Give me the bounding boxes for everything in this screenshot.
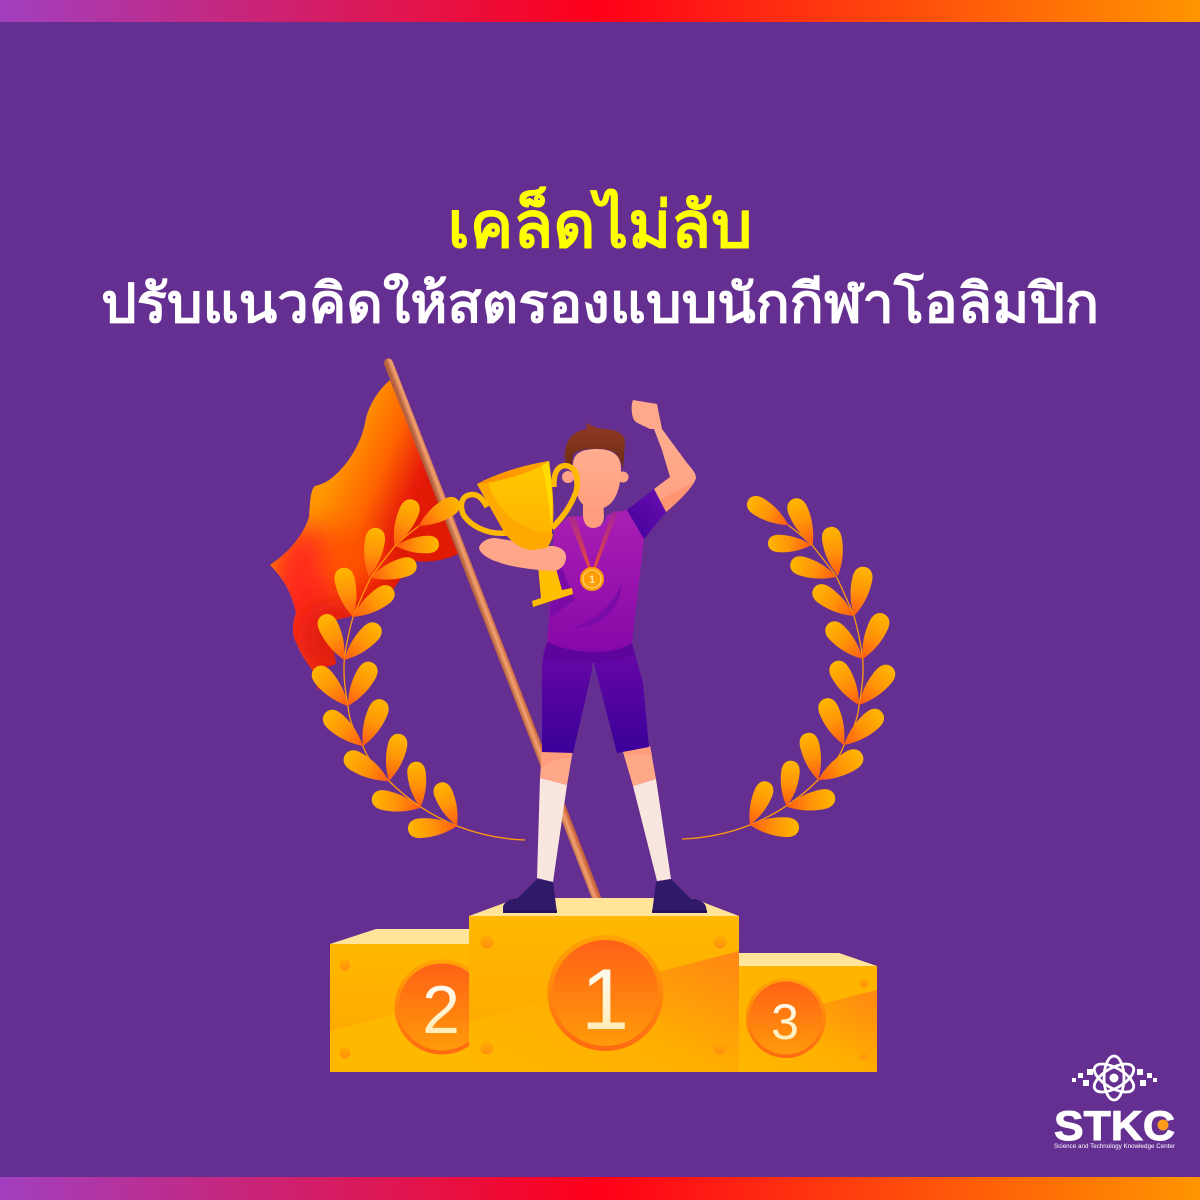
trophy rim — [477, 461, 549, 484]
podium — [330, 898, 877, 1072]
logo pixel dots — [1072, 1069, 1157, 1086]
t-shirt — [547, 510, 644, 652]
bottom gradient bar — [0, 1177, 1200, 1200]
title line 1: เคล็ดไม่ลับ — [448, 187, 752, 261]
right sock — [633, 779, 671, 881]
raised arm — [654, 429, 696, 512]
medal — [580, 567, 604, 591]
hair — [565, 423, 625, 470]
right laurel wreath — [682, 492, 900, 839]
trophy cup highlight — [541, 461, 552, 526]
shorts waist shadow — [544, 642, 635, 663]
logo tagline: Science and Technology Knowledge Center — [1054, 1144, 1175, 1150]
right leg — [623, 746, 656, 786]
left laurel wreath — [307, 493, 525, 840]
podium step 3: 3 — [771, 994, 799, 1050]
flag — [270, 380, 458, 692]
left sock — [537, 778, 567, 882]
medal: 1 — [589, 574, 595, 586]
flag pole — [388, 363, 597, 899]
sleeve — [627, 489, 666, 539]
trophy cup shade — [477, 483, 553, 550]
podium step 3 — [730, 953, 877, 1072]
right shoe — [652, 879, 707, 913]
trophy cup — [477, 461, 553, 550]
fist — [632, 400, 662, 429]
ears — [562, 471, 628, 483]
forearm holding trophy — [479, 538, 566, 571]
podium step 2 — [330, 929, 469, 1072]
shirt fold — [572, 583, 622, 628]
podium step 1 — [469, 898, 739, 1072]
logo atom icon — [1090, 1056, 1138, 1100]
podium step 2: 2 — [422, 972, 460, 1048]
trophy stem and base — [532, 565, 573, 607]
face — [573, 449, 621, 509]
neck — [583, 498, 604, 528]
upper arm shading — [660, 482, 694, 512]
medal ribbon — [568, 511, 618, 568]
STKC logo — [1054, 1056, 1175, 1150]
trophy handles — [461, 466, 577, 533]
title — [101, 187, 1099, 334]
shoe soles — [503, 910, 707, 913]
top gradient bar — [0, 0, 1200, 22]
left shoe — [503, 879, 557, 913]
podium step 1: 1 — [581, 952, 629, 1048]
left leg — [540, 750, 573, 785]
athlete — [461, 400, 707, 913]
logo orange dot — [1158, 1120, 1168, 1130]
title line 2: ปรับแนวคิดให้สตรองแบบนักกีฬาโอลิมปิก — [101, 272, 1099, 334]
knee shading — [541, 746, 652, 768]
shorts — [542, 640, 649, 753]
logo wordmark: STKC — [1054, 1102, 1175, 1149]
shirt shadow under arm — [550, 563, 575, 618]
